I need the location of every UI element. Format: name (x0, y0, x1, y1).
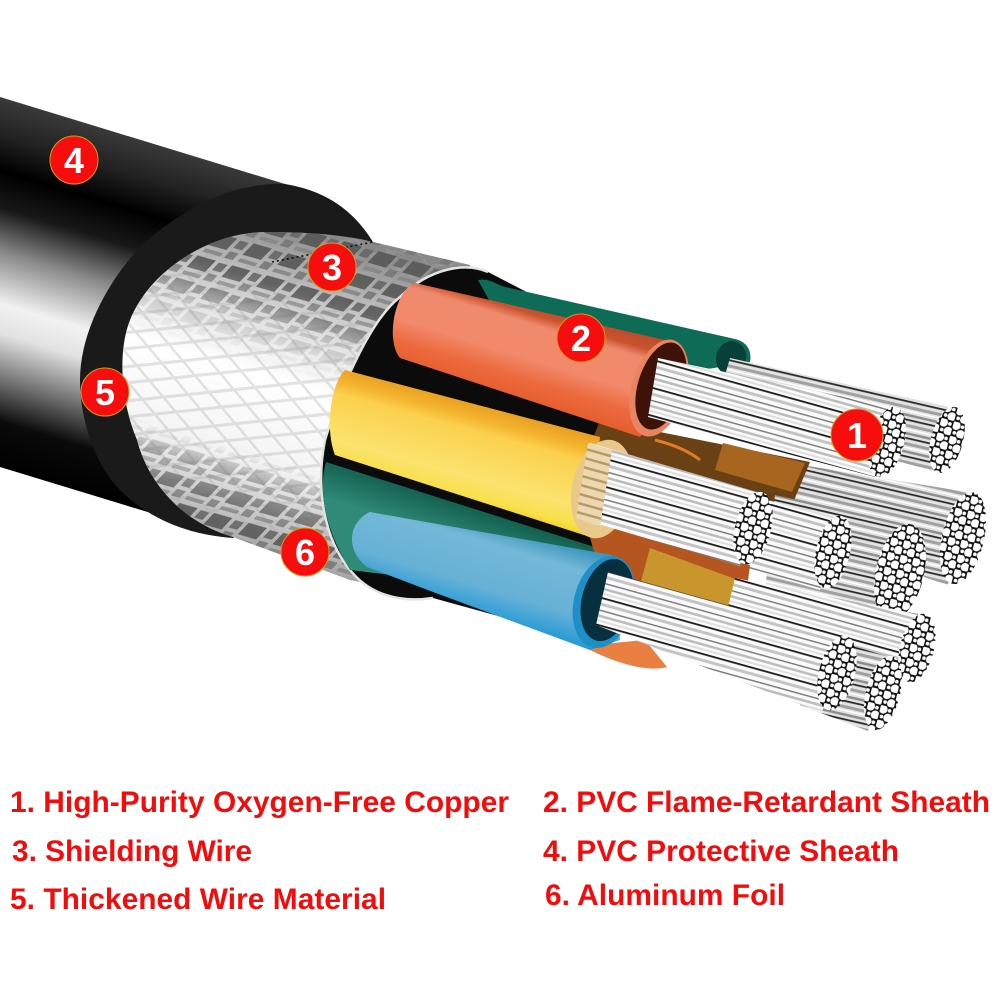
badge 1 (831, 409, 883, 461)
legend item 2: 2. PVC Flame-Retardant Sheath (543, 786, 990, 819)
copper foil lower (640, 548, 738, 610)
orange core behind blue (590, 640, 667, 669)
foil rim highlight (321, 268, 488, 599)
legend item 6: 6. Aluminum Foil (545, 879, 785, 912)
shielding braid and aluminum foil (122, 232, 470, 597)
orange flame-retardant core (393, 283, 699, 444)
cable illustration (0, 97, 994, 734)
legend item 3: 3. Shielding Wire (12, 835, 252, 868)
blue core (352, 512, 645, 655)
dark brown fill between upper wires (585, 420, 810, 510)
badge 3 (308, 243, 356, 291)
inner copper strand upper (655, 440, 700, 460)
legend item 5: 5. Thickened Wire Material (10, 883, 386, 916)
legend item 4: 4. PVC Protective Sheath (543, 835, 899, 868)
copper foil upper (715, 443, 805, 492)
badge 5 (81, 368, 129, 416)
conductor: right large (780, 463, 994, 589)
foil opening interior (321, 268, 600, 622)
badge 3: 3 (322, 247, 342, 288)
copper wire conductors (585, 358, 994, 734)
conductor: back top (715, 358, 971, 477)
badge 4 (50, 136, 98, 184)
conductor: bottom right (800, 636, 909, 734)
lower green core (323, 462, 620, 600)
back green core (478, 280, 750, 372)
conductor: yellow core copper (576, 443, 779, 568)
yellow core (330, 370, 642, 544)
badge 2 (557, 314, 605, 362)
conductor: middle (735, 495, 858, 592)
thick black wire material ring (80, 184, 373, 538)
badge 4: 4 (64, 140, 84, 181)
badge 2: 2 (571, 318, 591, 359)
badge 6: 6 (295, 532, 315, 573)
badge 5: 5 (95, 372, 115, 413)
badge 6 (281, 528, 329, 576)
back green core opening (711, 337, 751, 379)
brown fill between lower wires (585, 520, 750, 605)
conductor: orange core copper (648, 358, 913, 481)
conductor: lower right (725, 578, 942, 686)
legend item 1: 1. High-Purity Oxygen-Free Copper (10, 786, 509, 819)
conductor: blue core copper (596, 572, 864, 714)
badge 1: 1 (847, 415, 867, 456)
conductor: right middle (765, 495, 934, 625)
outer PVC protective sheath (0, 97, 285, 538)
